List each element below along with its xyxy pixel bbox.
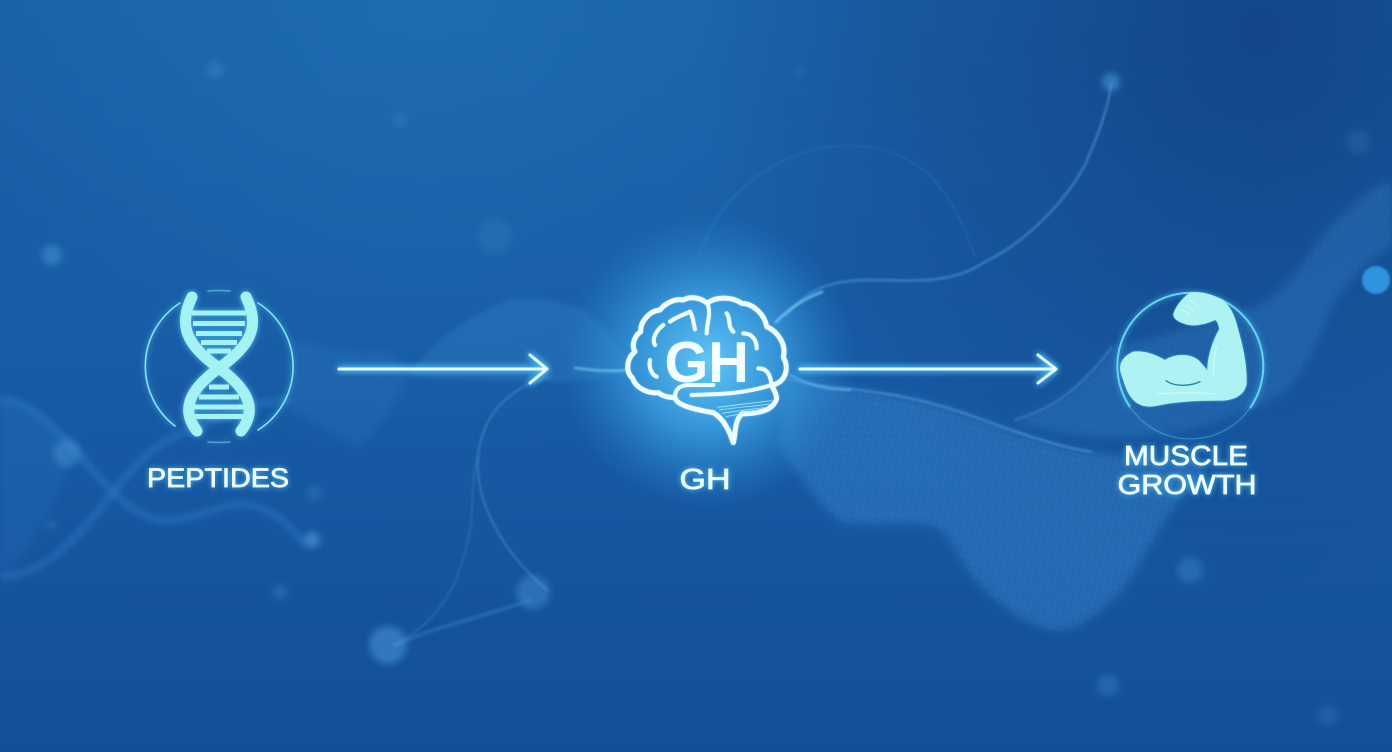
icon: DNA helix <box>145 290 293 442</box>
arm silhouette <box>1120 292 1247 407</box>
label: muscle growth: MUSCLE <box>1124 440 1248 471</box>
arrow: GH to muscle growth <box>800 355 1056 383</box>
label: GH: GH <box>680 464 730 496</box>
icon: flexed arm <box>1117 292 1263 439</box>
brain outline <box>628 298 786 443</box>
wave mesh: right ribbons <box>780 180 1392 630</box>
arm crease <box>1166 381 1200 385</box>
wave mesh: left ribbons <box>0 299 640 577</box>
bright particle: right edge <box>1362 266 1390 294</box>
DNA enclosing ring <box>145 290 293 442</box>
arrow: peptides to GH <box>339 355 547 383</box>
icon: brain <box>628 298 786 443</box>
thin flowing lines <box>395 84 1111 645</box>
light streaks from brain <box>575 292 850 390</box>
label: muscle growth: GROWTH <box>1118 469 1256 500</box>
center glow <box>558 212 858 512</box>
brain cerebellum <box>717 401 772 417</box>
label: peptides: PEPTIDES <box>147 463 289 493</box>
DNA strands and rungs <box>185 297 253 431</box>
arm details <box>1157 301 1217 394</box>
brain folds <box>650 303 772 397</box>
brain GH text: GH <box>665 331 749 395</box>
label: muscle growth <box>1118 440 1256 500</box>
arm ring <box>1117 293 1263 439</box>
